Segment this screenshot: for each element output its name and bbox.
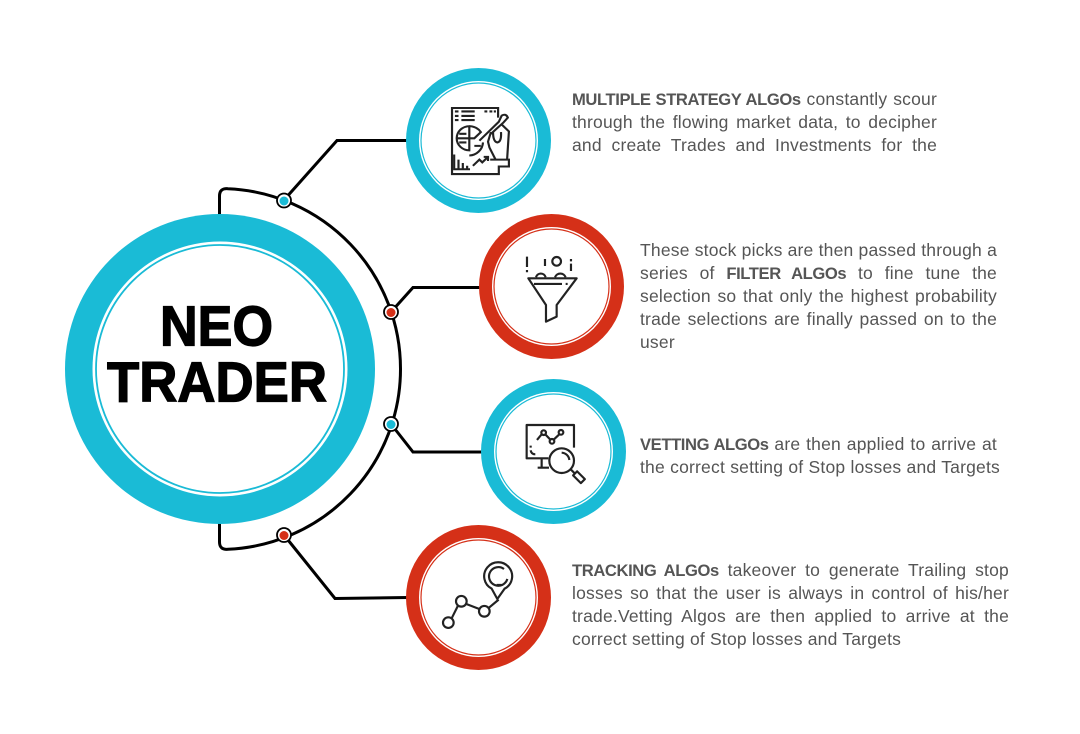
- text: tracking algos: [572, 560, 1009, 649]
- connector node 2: [384, 305, 398, 319]
- text: vetting algos: VETTING ALGOs are then applied to arrive at: [640, 434, 997, 454]
- text: filter algos: These stock picks are then passed through a: [640, 240, 997, 260]
- text: tracking algos: correct setting of Stop losses and Targets: [572, 629, 901, 649]
- text: vetting algos: [640, 434, 1000, 477]
- text: tracking algos: trade.Vetting Algos are then applied to arrive at the: [572, 606, 1009, 626]
- text: tracking algos: TRACKING ALGOs takeover to generate Trailing stop: [572, 560, 1009, 580]
- connector lines: [284, 140, 483, 598]
- circle 1: strategy: [406, 68, 551, 213]
- text: filter algos: [640, 240, 997, 352]
- icon: analysis report and hand: [452, 108, 509, 174]
- hub title: [107, 294, 327, 414]
- text: filter algos: trade selections are finally passed on to the: [640, 309, 997, 329]
- text: filter algos: series of FILTER ALGOs to fine tune the: [640, 263, 997, 283]
- text: multiple strategy algos: through the flowing market data, to decipher: [572, 112, 937, 132]
- connector arc around hub: [220, 189, 400, 549]
- circle 2: filter: [479, 214, 624, 359]
- text: multiple strategy algos: MULTIPLE STRATEGY ALGOs constantly scour: [572, 89, 937, 109]
- icon: funnel: [527, 257, 577, 322]
- text: multiple strategy algos: [572, 89, 937, 155]
- connector node 3: [384, 417, 398, 431]
- hub title: NEO: [160, 294, 273, 358]
- text: filter algos: user: [640, 332, 675, 352]
- text: multiple strategy algos: and create Trades and Investments for the: [572, 135, 937, 155]
- circle 4: tracking: [406, 525, 551, 670]
- connector node 1: [277, 194, 291, 208]
- circle 3: vetting: [481, 379, 626, 524]
- hub circle: [65, 214, 375, 524]
- hub title: TRADER: [107, 350, 327, 414]
- text: tracking algos: losses so that the user is always in control of his/her: [572, 583, 1009, 603]
- text: filter algos: selection so that only the highest probability: [640, 286, 997, 306]
- icon: route with location pin: [443, 562, 512, 628]
- icon: monitor with magnifier: [527, 425, 585, 483]
- connector node 4: [277, 528, 291, 542]
- text: vetting algos: the correct setting of Stop losses and Targets: [640, 457, 1000, 477]
